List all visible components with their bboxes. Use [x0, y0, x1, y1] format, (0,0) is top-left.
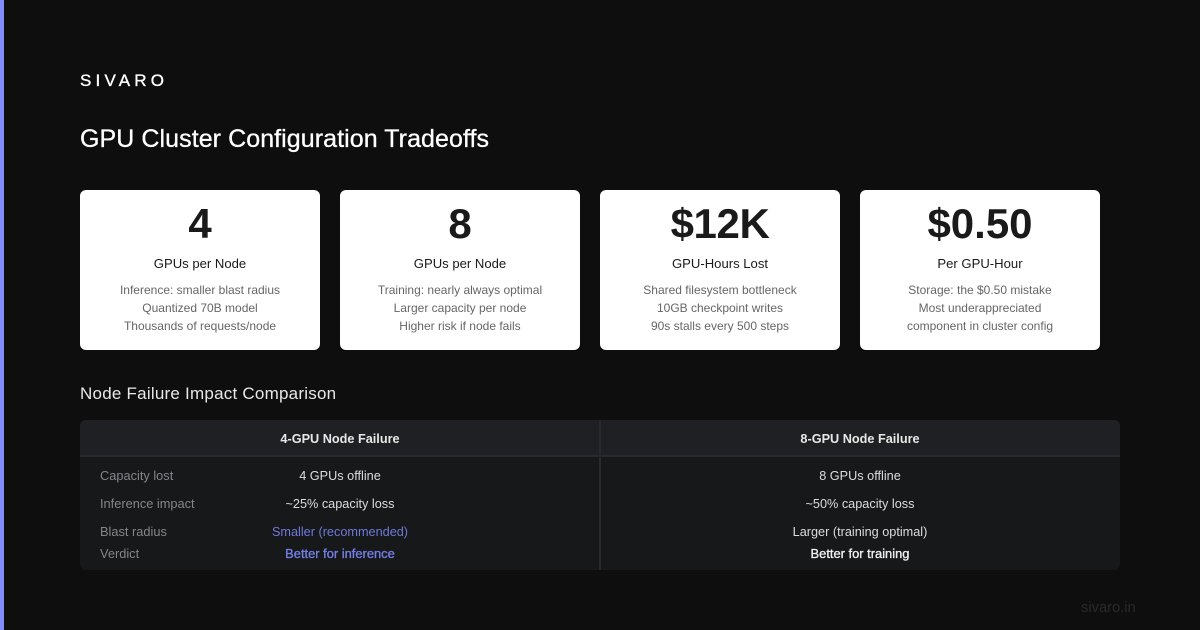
stat value: 8	[448, 200, 472, 247]
row label: Inference impact	[100, 496, 195, 511]
stat description: Most underappreciated	[919, 301, 1041, 315]
4-GPU value: Better for inference	[285, 546, 395, 561]
stat card: 8 GPUs per node	[340, 190, 580, 350]
8-GPU value: Larger (training optimal)	[793, 525, 927, 539]
stat description: Inference: smaller blast radius	[120, 283, 280, 297]
stat description: Shared filesystem bottleneck	[643, 283, 797, 297]
stat description: 10GB checkpoint writes	[657, 301, 783, 315]
stat description	[378, 283, 542, 333]
left accent bar	[0, 0, 4, 630]
stat description: 90s stalls every 500 steps	[651, 319, 789, 333]
8-GPU value: Better for training	[811, 546, 909, 561]
header: 4-GPU column: 4-GPU Node Failure	[280, 432, 400, 446]
stat label: GPUs per Node	[154, 256, 246, 271]
stat description: Training: nearly always optimal	[378, 283, 542, 297]
stat value: $12K	[671, 200, 769, 247]
stat description	[643, 283, 797, 333]
stat value: $0.50	[927, 200, 1033, 247]
stat label: Per GPU-Hour	[937, 256, 1023, 271]
logo wordmark: SIVARO	[80, 71, 168, 90]
stat card: $12K GPU-hours lost	[600, 190, 840, 350]
stat description: component in cluster config	[907, 319, 1053, 333]
row label: Capacity lost	[100, 468, 173, 483]
row: capacity lost	[100, 468, 901, 483]
row label: Blast radius	[100, 524, 167, 539]
title: GPU Cluster Configuration Tradeoffs	[80, 125, 489, 153]
row label: Verdict	[100, 546, 139, 561]
footer url: sivaro.in	[1081, 600, 1136, 616]
column divider	[599, 420, 601, 570]
stat value: 4	[188, 200, 212, 247]
stat description: Quantized 70B model	[142, 301, 258, 315]
stat card: 4 GPUs per node	[80, 190, 320, 350]
table header band	[80, 420, 1120, 457]
8-GPU value: 8 GPUs offline	[819, 469, 901, 483]
stat label: GPUs per Node	[414, 256, 506, 271]
row: verdict	[100, 546, 909, 561]
header: 8-GPU column: 8-GPU Node Failure	[800, 432, 920, 446]
stat description	[120, 283, 280, 333]
stat description	[907, 283, 1053, 333]
stat description: Storage: the $0.50 mistake	[908, 283, 1052, 297]
8-GPU value: ~50% capacity loss	[806, 497, 914, 511]
row: blast radius	[100, 524, 927, 539]
row: inference impact	[100, 496, 914, 511]
section heading: Node Failure Impact Comparison	[80, 384, 336, 403]
4-GPU value: ~25% capacity loss	[286, 497, 394, 511]
stat description: Thousands of requests/node	[124, 319, 276, 333]
4-GPU value: Smaller (recommended)	[272, 525, 408, 539]
stat label: GPU-Hours Lost	[672, 256, 768, 271]
4-GPU value: 4 GPUs offline	[299, 469, 381, 483]
stat description: Higher risk if node fails	[399, 319, 521, 333]
stat description: Larger capacity per node	[394, 301, 526, 315]
comparison table	[80, 420, 1120, 570]
stat card: $0.50 per GPU-hour	[860, 190, 1100, 350]
